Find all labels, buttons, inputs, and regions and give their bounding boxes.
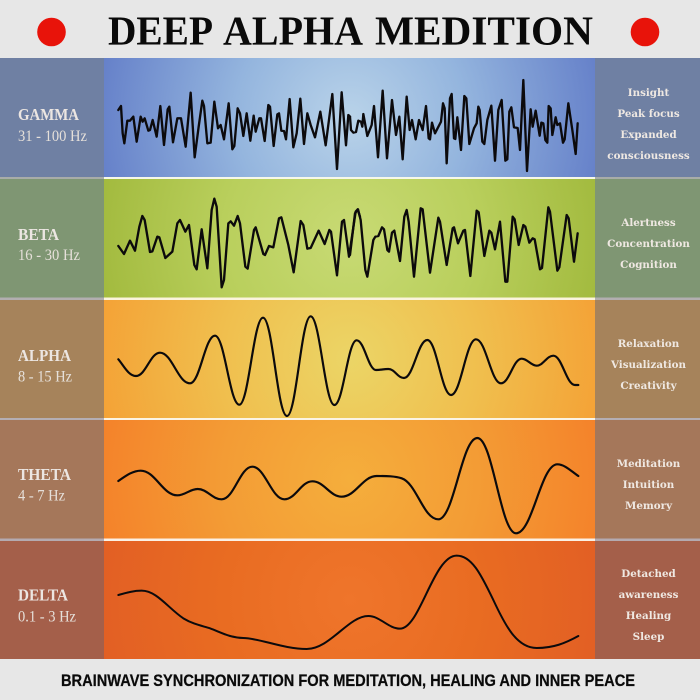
gamma label panel [0,58,104,177]
delta label panel [0,541,104,659]
beta waveform [118,199,578,287]
alpha waveform [118,316,578,416]
delta label panel: 0.1 - 3 Hz [18,608,76,626]
theta label panel [0,420,104,538]
icon: right red dot [631,18,659,46]
delta benefits panel: Healing [626,610,671,622]
panel: beta row [0,179,700,298]
alpha benefits panel: Relaxation [618,338,680,350]
alpha benefits panel [595,300,700,418]
theta wave panel [104,420,595,538]
title: ALPHA [223,8,363,54]
theta label panel: 4 - 7 Hz [18,488,65,504]
beta benefits panel: Concentration [607,238,690,250]
icon: left red dot [37,18,66,46]
delta wave panel [104,541,595,659]
theta label panel: THETA [18,465,71,484]
gamma benefits panel: Expanded [620,129,677,141]
title: MEDITION [375,8,593,54]
delta waveform [118,556,578,649]
gamma benefits panel: Insight [628,87,669,99]
alpha wave panel [104,300,595,418]
header band [37,8,659,54]
theta waveform [118,438,578,533]
gamma benefits panel [595,58,700,177]
delta label panel: DELTA [18,586,68,604]
gamma wave panel [104,58,595,177]
alpha label panel [0,300,104,418]
panel: delta row [0,541,700,659]
gamma benefits panel: consciousness [607,150,690,162]
beta label panel: 16 - 30 Hz [18,247,80,264]
beta wave panel [104,179,595,298]
gamma label panel: 31 - 100 Hz [18,128,87,145]
beta benefits panel [595,179,700,298]
delta benefits panel: Sleep [633,631,664,643]
theta benefits panel: Memory [625,500,673,512]
beta benefits panel: Alertness [620,217,676,229]
gamma benefits panel: Peak focus [617,108,680,120]
delta benefits panel: Detached [621,568,676,580]
delta benefits panel: awareness [619,589,679,601]
title: DEEP [108,8,213,54]
gamma waveform [118,80,578,171]
gamma label panel: GAMMA [18,105,79,124]
theta benefits panel: Intuition [623,479,675,491]
alpha label panel: ALPHA [18,346,71,365]
panel: alpha row [0,300,700,418]
theta benefits panel [595,420,700,538]
beta benefits panel: Cognition [620,259,677,271]
alpha label panel: 8 - 15 Hz [18,368,72,386]
alpha benefits panel: Creativity [620,380,678,392]
theta benefits panel: Meditation [617,458,681,470]
title [108,8,593,54]
panel: theta row [0,420,700,538]
beta label panel: BETA [18,225,59,244]
alpha benefits panel: Visualization [610,359,687,371]
delta benefits panel [595,541,700,659]
panel: gamma row [0,58,700,177]
beta label panel [0,179,104,298]
